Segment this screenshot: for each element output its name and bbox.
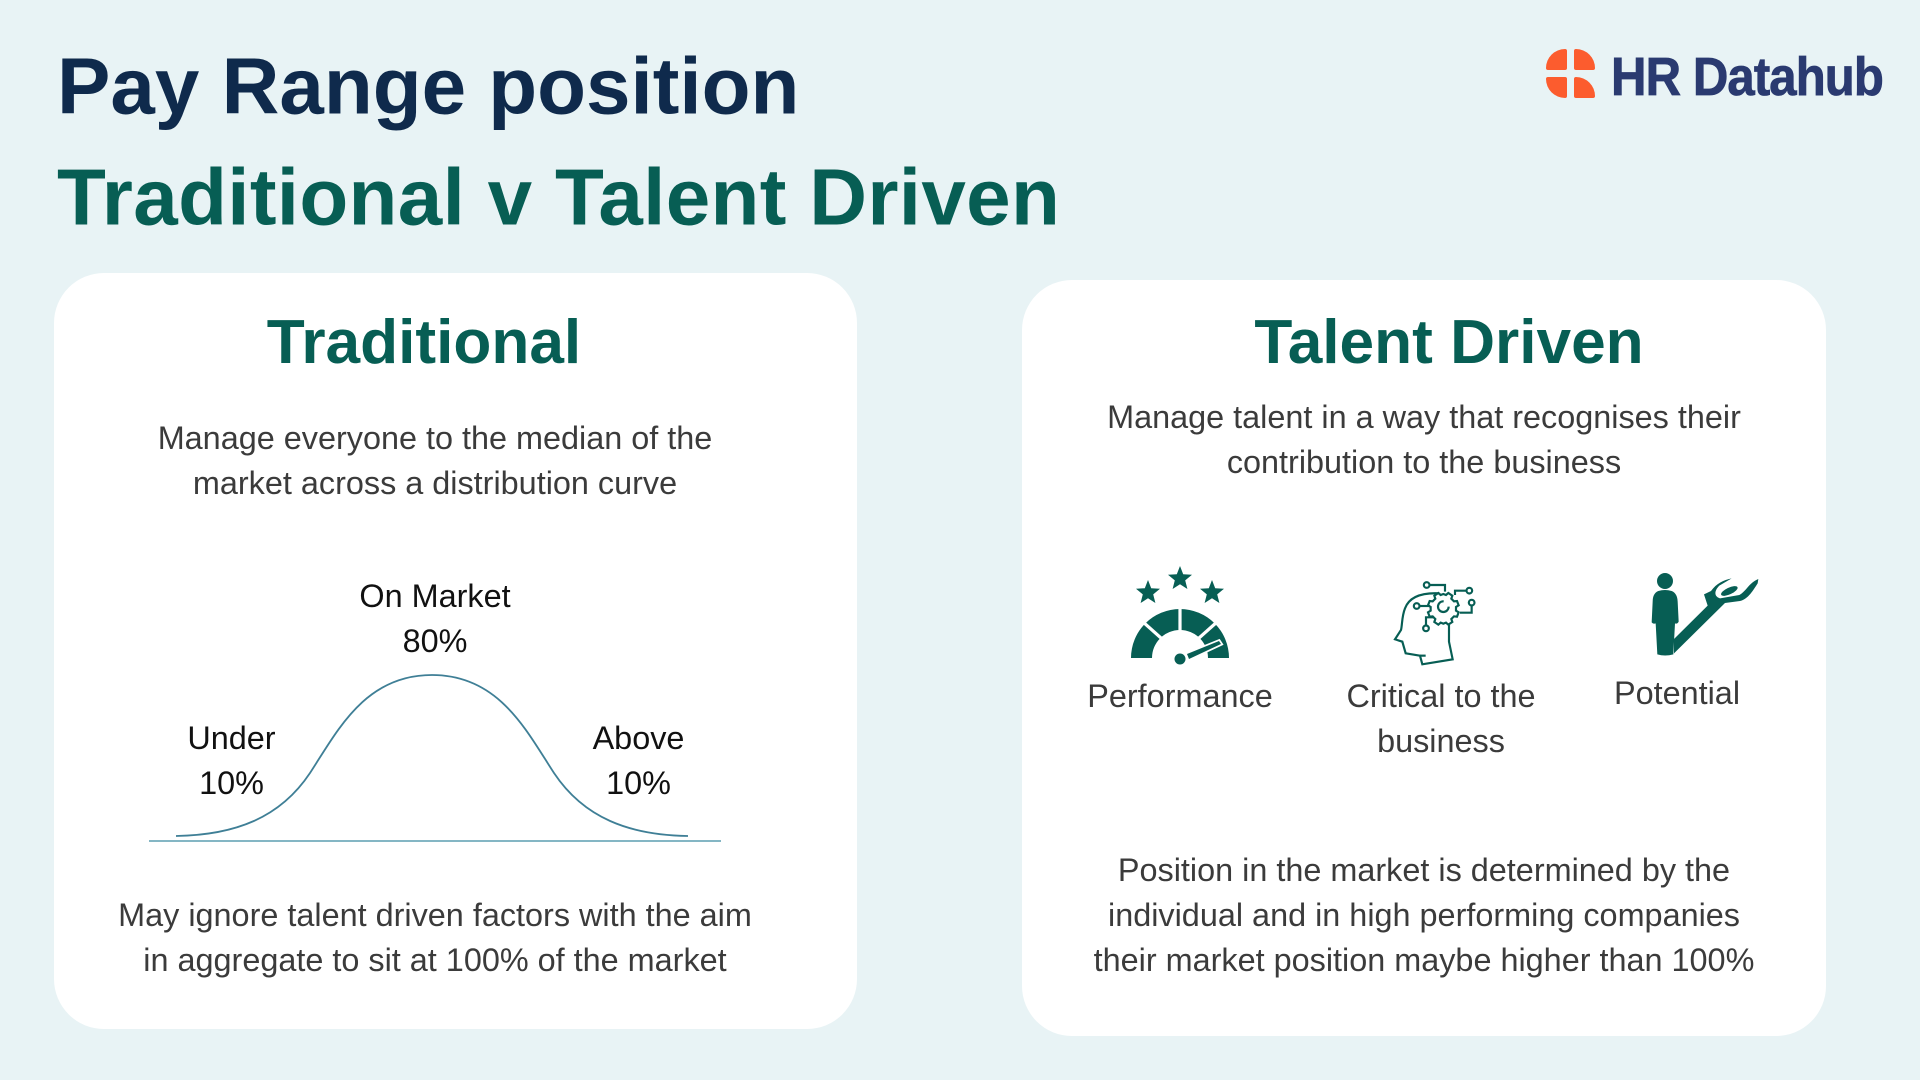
label: potential: Potential [1614,675,1740,711]
label: above [593,720,684,801]
text: talent description: contribution to the business [1227,444,1621,480]
title: Pay Range position [57,42,799,130]
title: Traditional v Talent Driven [57,152,1060,242]
heading: traditional: Traditional [267,308,581,377]
logo: HR Datahub: HR Datahub [1611,46,1883,107]
label: critical to the business [1346,678,1536,759]
label: performance: Performance [1087,678,1273,714]
text: talent description: Manage talent in a way that recognises their [1107,399,1741,435]
text: traditional description: Manage everyone to the median of the [158,420,712,456]
text: talent note [1094,852,1754,978]
text: talent description [1107,399,1741,480]
label: on market [359,578,511,659]
label: under [187,720,276,801]
label: under: 10% [199,765,264,801]
heading: talent driven: Talent Driven [1254,308,1644,377]
icon: critical head with gear [1395,582,1474,664]
title [57,42,1060,242]
icon: performance gauge [1131,566,1229,664]
text: talent note: their market position maybe higher than 100% [1094,942,1754,978]
label: critical to the business: business [1377,723,1505,759]
label: critical to the business: Critical to the [1346,678,1536,714]
panel: traditional [54,273,857,1029]
icon: potential person with shadow [1652,573,1758,655]
text: traditional note: in aggregate to sit at 100% of the market [143,942,727,978]
text: traditional note [118,897,752,978]
panel: talent driven [1022,280,1826,1036]
text: traditional note: May ignore talent driven factors with the aim [118,897,752,933]
text: traditional description [158,420,712,501]
label: on market: 80% [403,623,467,659]
text: traditional description: market across a distribution curve [193,465,677,501]
chart: distribution curve [149,675,721,841]
label: above: 10% [606,765,671,801]
text: talent note: Position in the market is determined by the [1118,852,1730,888]
label: under: Under [187,720,276,756]
label: above: Above [593,720,684,756]
text: talent note: individual and in high performing companies [1108,897,1740,933]
label: on market: On Market [359,578,511,614]
